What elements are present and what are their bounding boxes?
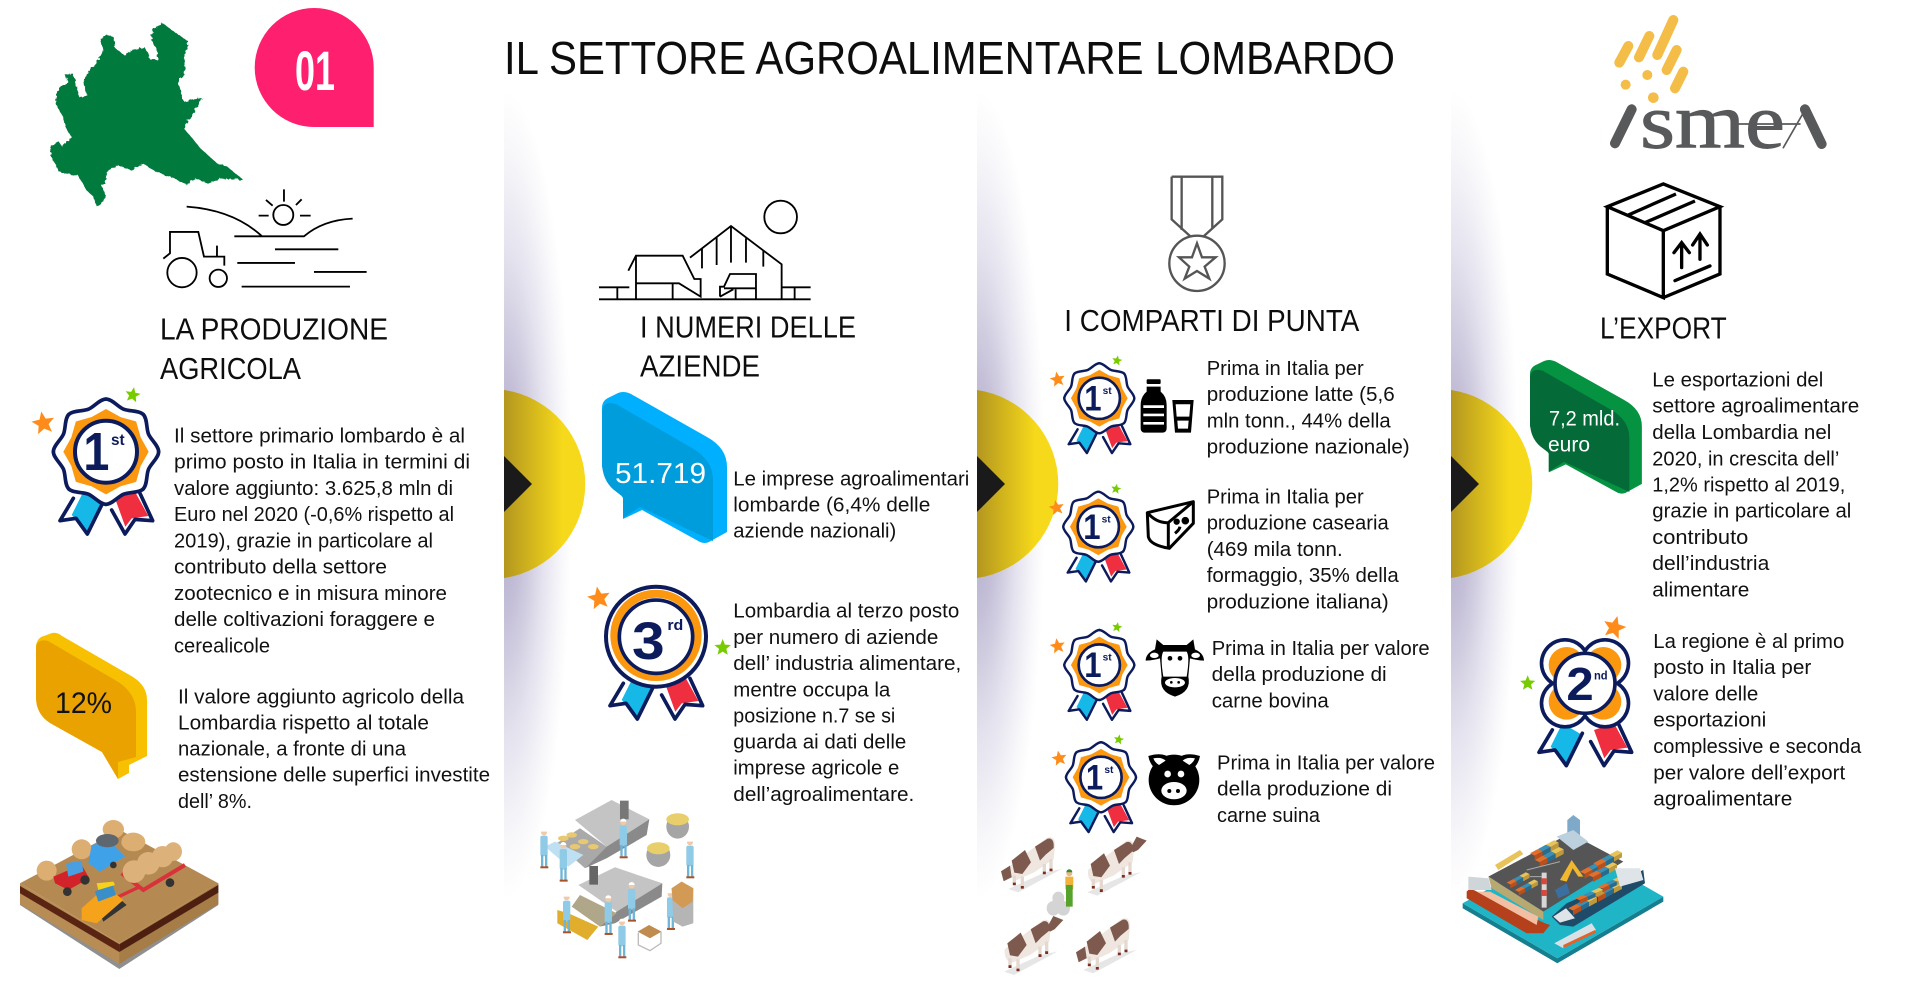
text block: pork: carne suina [1217, 804, 1321, 827]
text block: beef: della produzione di [1212, 663, 1387, 686]
text block: exports: alimentare [1652, 578, 1749, 601]
icon: cow head [1146, 639, 1204, 697]
panel background: column 2 shadow [504, 60, 624, 910]
text block: ranking: dell’agroalimentare. [733, 783, 914, 806]
text block: cheese: produzione italiana) [1207, 590, 1389, 613]
heading [160, 312, 388, 386]
text block: exports: settore agroalimentare [1652, 395, 1859, 418]
heading: AGRICOLA [160, 352, 302, 386]
heading: I NUMERI DELLE [640, 310, 856, 344]
text block: primary sector: cerealicole [174, 634, 270, 657]
text block: primary sector: zootecnico e in misura minore [174, 582, 447, 605]
icon: pig head [1148, 754, 1200, 805]
text block: value added: estensione delle superfici investite [178, 764, 490, 787]
text block: exports: contributo [1652, 526, 1748, 549]
medal: third place: rd [667, 618, 683, 634]
panel: i numeri delle aziende [540, 201, 969, 958]
text block: primary sector: contributo della settore [174, 556, 387, 578]
illustration: cows and farmer [1001, 837, 1147, 975]
medal: third place [586, 585, 731, 719]
text block: pork: della produzione di [1217, 778, 1392, 801]
medal: first place: 1 [83, 423, 109, 482]
text block: export ranking: valore delle [1653, 682, 1758, 705]
text block: exports: dell’industria [1652, 552, 1770, 575]
medal: first place: st [111, 432, 125, 449]
panel background: column 4 shadow [1451, 60, 1571, 910]
medal: first place [30, 386, 170, 534]
text block: primary sector: Il settore primario lombardo è al [174, 424, 465, 447]
text block: ranking: dell’ industria alimentare, [733, 652, 961, 675]
text block: milk [1207, 357, 1410, 458]
text block: pork: Prima in Italia per valore [1217, 751, 1435, 774]
callout: 7,2 mld euro [1530, 360, 1642, 494]
badge: 01: 01 [295, 39, 335, 102]
heading: AZIENDE [640, 350, 760, 384]
text block: cheese [1207, 485, 1399, 613]
callout: 7,2 mld euro: 7,2 mld. [1549, 407, 1620, 431]
text block: export ranking: per valore dell’export [1653, 761, 1846, 784]
text block: primary sector: delle coltivazioni foraggere e [174, 608, 435, 631]
text block: cheese: Prima in Italia per [1207, 485, 1364, 508]
medal: third place: 3 [632, 612, 665, 671]
text block: export ranking [1653, 630, 1862, 810]
text block: primary sector [174, 424, 470, 657]
panel: i comparti di punta [1001, 177, 1435, 975]
text block: exports: grazie in particolare al [1652, 500, 1851, 523]
text block: exports: 1,2% rispetto al 2019, [1652, 473, 1845, 496]
text block: companies: aziende nazionali) [733, 520, 896, 543]
callout: 51.719: 51.719 [615, 458, 706, 490]
panel background: column 3 shadow [977, 60, 1097, 910]
medal: first in cheese: 1 [1083, 507, 1101, 547]
text block: ranking: per numero di aziende [733, 626, 938, 649]
text block: companies [733, 468, 969, 543]
badge: 01 [255, 8, 374, 127]
medal: first in beef [1049, 621, 1142, 720]
heading: I COMPARTI DI PUNTA [1064, 304, 1360, 338]
text block: pork [1217, 751, 1435, 827]
text block: value added: dell’ 8%. [178, 790, 252, 813]
illustration: isometric farm field [20, 820, 218, 969]
callout: 7,2 mld euro: euro [1548, 433, 1590, 457]
text block: value added: nazionale, a fronte di una [178, 738, 407, 761]
text block: cheese: produzione casearia [1207, 512, 1389, 535]
text block: milk: produzione nazionale) [1207, 435, 1410, 458]
illustration: isometric port [1463, 815, 1663, 963]
medal: second place: nd [1594, 668, 1608, 682]
heading [640, 310, 856, 384]
arrow: yellow tab column 4 [1451, 390, 1532, 578]
logo: ISMEA [1615, 20, 1822, 164]
text block: companies: lombarde (6,4% delle [733, 494, 930, 517]
medal: first in cheese: st [1102, 514, 1111, 525]
text block: beef [1212, 637, 1430, 712]
panel: la produzione agricola [20, 189, 490, 969]
illustration: food factory [540, 800, 694, 958]
icon: cardboard box [1607, 184, 1720, 298]
icon: farm buildings [599, 201, 811, 299]
text block: primary sector: valore aggiunto: 3.625,8 mln di [174, 477, 453, 500]
text block: milk: Prima in Italia per [1207, 357, 1364, 380]
text block: exports: 2020, in crescita dell’ [1652, 447, 1839, 470]
map of Lombardy [50, 24, 242, 205]
text block: beef: Prima in Italia per valore [1212, 637, 1430, 660]
text block: ranking: posizione n.7 se si [733, 704, 895, 727]
medal: first in pork: 1 [1086, 757, 1103, 797]
title: IL SETTORE AGROALIMENTARE LOMBARDO [504, 32, 1395, 84]
arrow: yellow tab column 3 [977, 390, 1058, 578]
medal: first in milk: st [1103, 386, 1112, 397]
text block: ranking: imprese agricole e [733, 757, 899, 780]
icon: medal [1169, 177, 1225, 291]
text block: primary sector: Euro nel 2020 (-0,6% rispetto al [174, 503, 454, 526]
text block: value added: Il valore aggiunto agricolo della [178, 685, 465, 708]
logo: ISMEA: sme [1640, 78, 1785, 164]
text block: milk: mln tonn., 44% della [1207, 409, 1391, 432]
medal: second place [1520, 613, 1632, 766]
text block: export ranking: esportazioni [1653, 709, 1766, 732]
text block: ranking: guarda ai dati delle [733, 731, 906, 754]
panel: export [1463, 184, 1862, 963]
heading: LA PRODUZIONE [160, 312, 388, 346]
arrow: yellow tab column 2 [504, 390, 585, 578]
medal: first in beef: 1 [1084, 645, 1102, 685]
text block: ranking: mentre occupa la [733, 678, 891, 701]
text block: exports [1652, 369, 1859, 601]
text block: value added: Lombardia rispetto al totale [178, 711, 429, 734]
text block: export ranking: posto in Italia per [1653, 656, 1811, 679]
medal: first in milk: 1 [1084, 378, 1102, 418]
text block: value added [178, 685, 490, 813]
text block: ranking: Lombardia al terzo posto [733, 600, 959, 623]
icon: tractor and field [163, 189, 367, 287]
medal: second place: 2 [1566, 658, 1594, 710]
medal: first in pork: st [1104, 765, 1114, 776]
text block: export ranking: La regione è al primo [1653, 630, 1844, 653]
heading: L’EXPORT [1600, 311, 1727, 345]
text block: exports: Le esportazioni del [1652, 369, 1823, 392]
medal: first in pork [1050, 733, 1143, 832]
text block: export ranking: agroalimentare [1653, 787, 1792, 810]
text block: export ranking: complessive e seconda [1653, 735, 1862, 758]
callout: 12%: 12% [55, 687, 112, 720]
text block: cheese: (469 mila tonn. [1207, 538, 1343, 561]
text block: primary sector: 2019), grazie in particolare al [174, 529, 433, 552]
medal: first in beef: st [1103, 653, 1112, 664]
medal: first in milk [1049, 354, 1142, 453]
text block: cheese: formaggio, 35% della [1207, 564, 1399, 587]
text block: ranking [733, 600, 961, 806]
callout: 12% [36, 633, 147, 779]
text block: beef: carne bovina [1212, 689, 1329, 712]
medal: first in cheese [1048, 483, 1141, 581]
text block: companies: Le imprese agroalimentari [733, 468, 969, 491]
text block: primary sector: primo posto in Italia in termini di [174, 450, 470, 474]
icon: cheese [1147, 502, 1193, 548]
callout: 51.719 [602, 392, 727, 543]
text block: milk: produzione latte (5,6 [1207, 383, 1395, 406]
text block: exports: della Lombardia nel [1652, 421, 1831, 444]
icon: milk bottle and glass [1141, 379, 1194, 433]
